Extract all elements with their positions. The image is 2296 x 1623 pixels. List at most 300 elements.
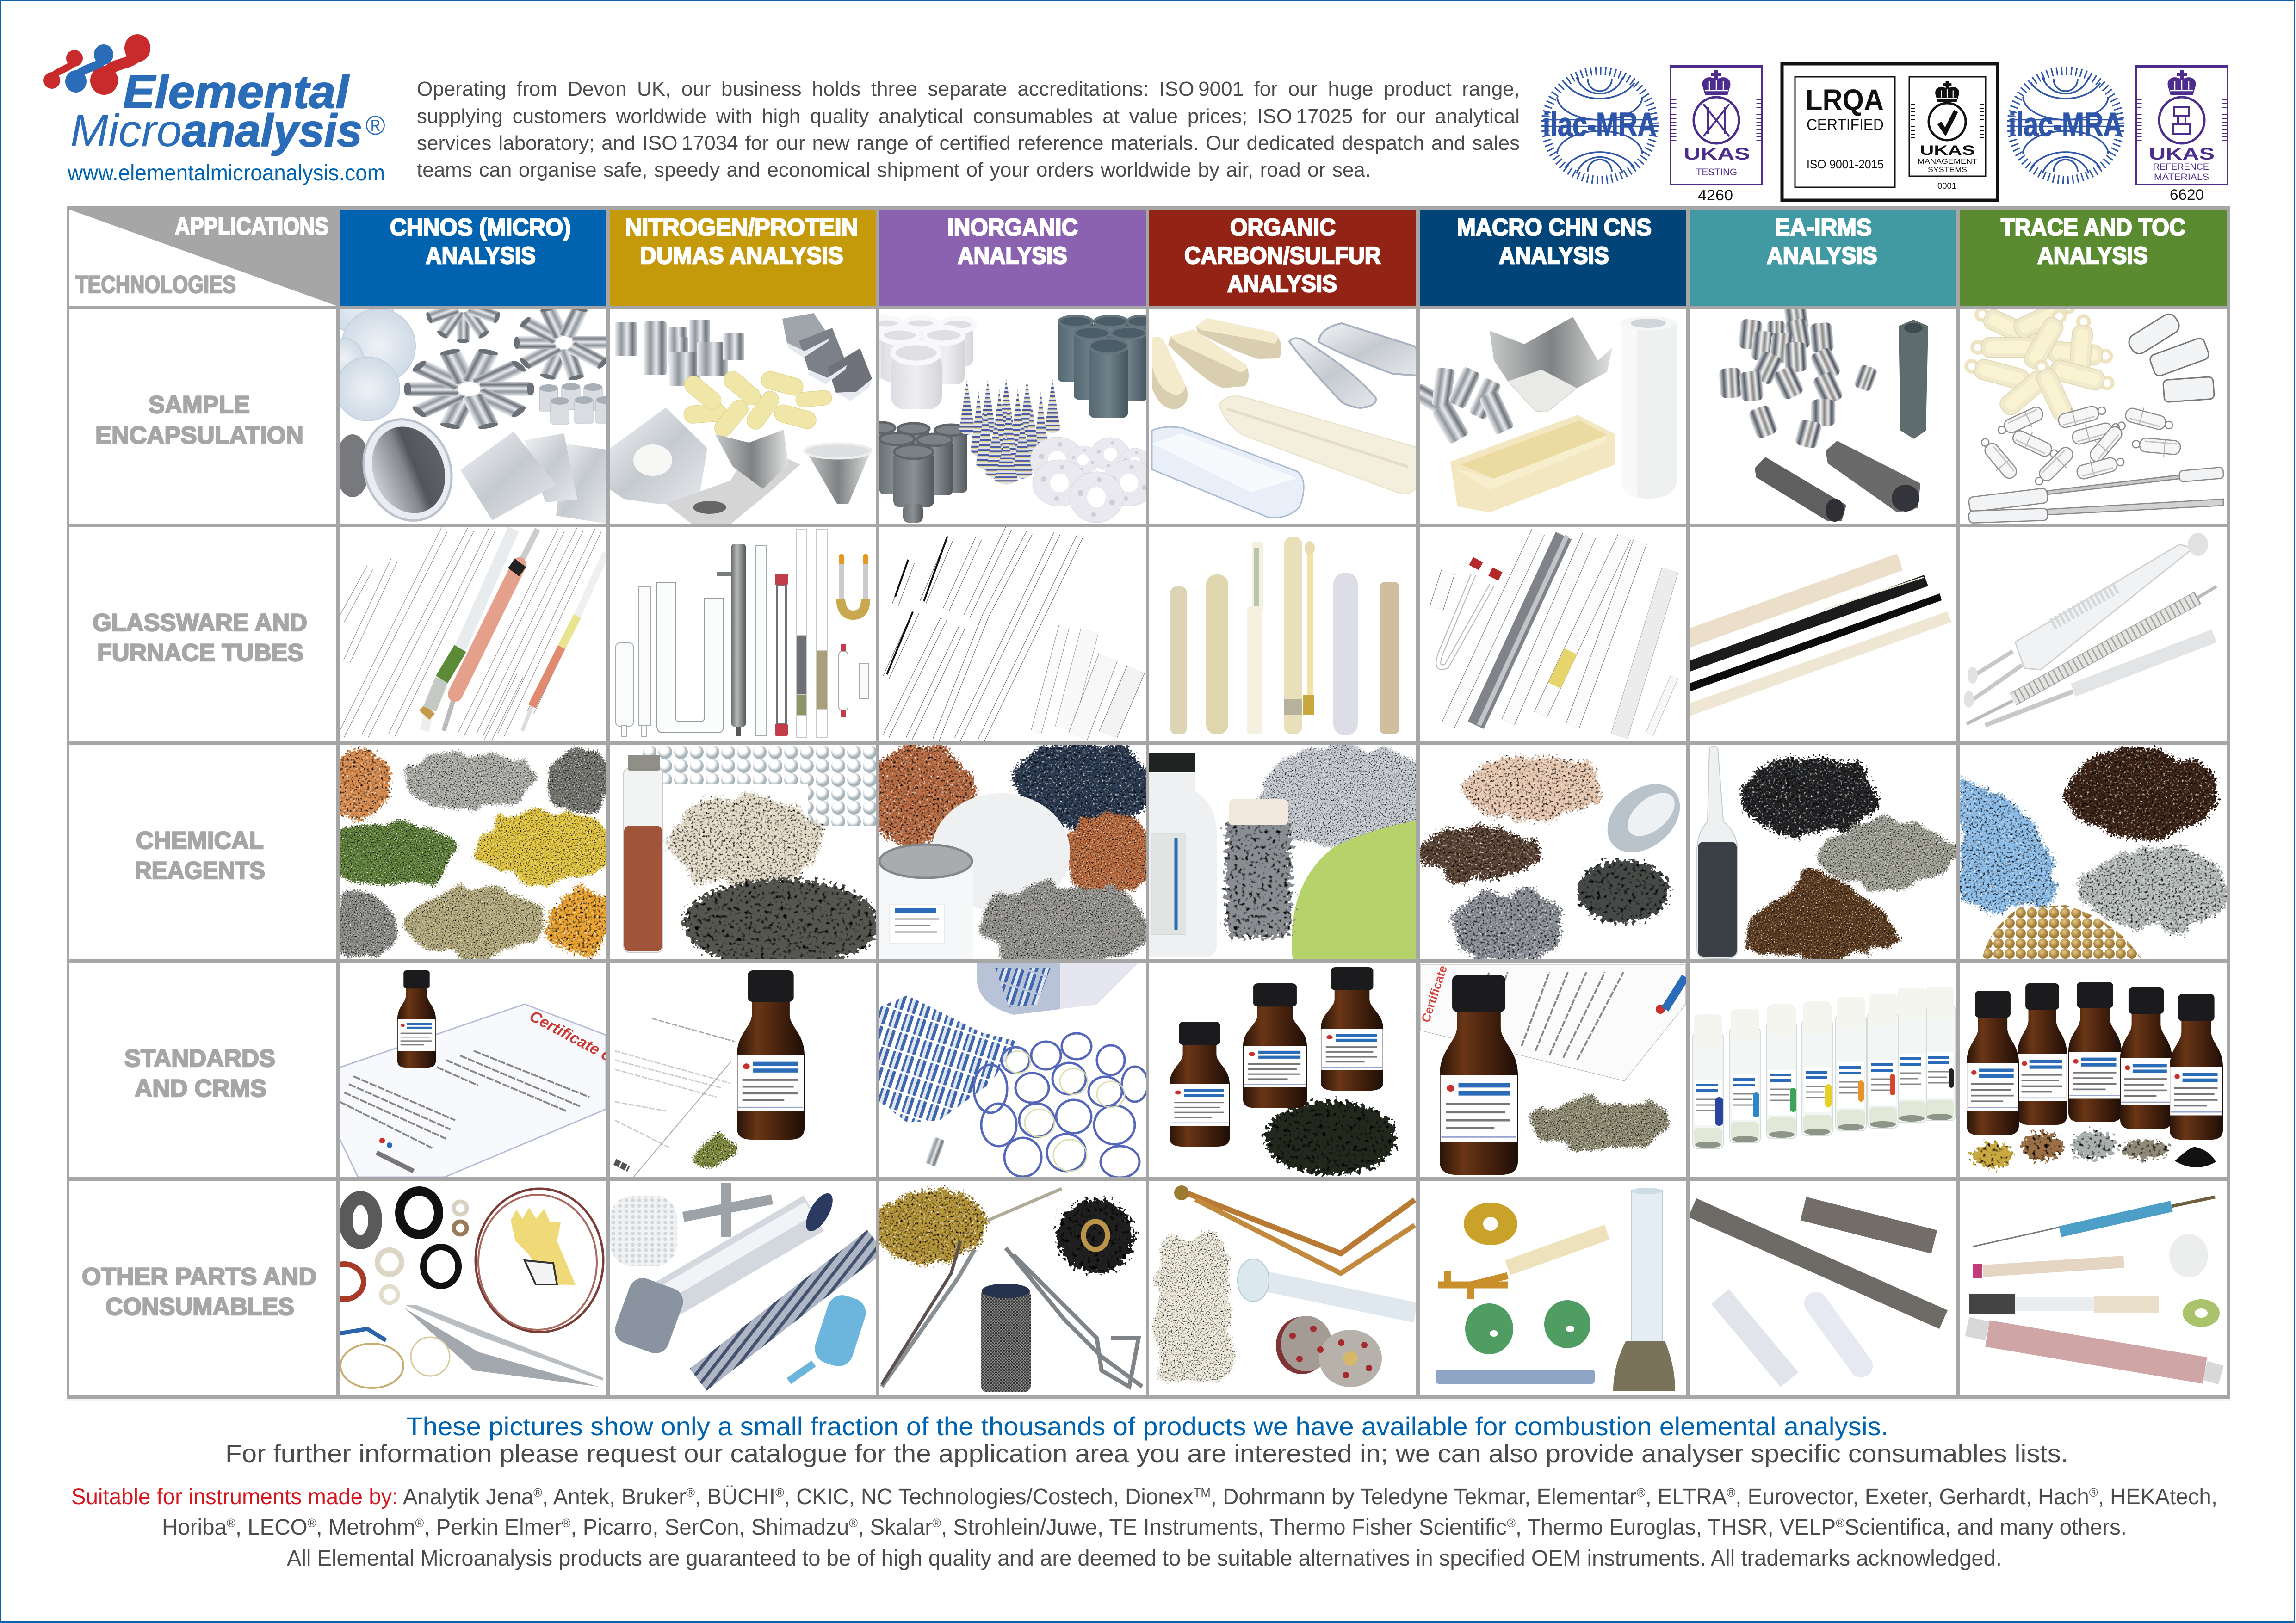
tweezers: [404, 1305, 603, 1387]
badge: LRQA certified ISO 9001-2015: LRQA: [1806, 83, 1884, 117]
badge: UKAS reference materials 6620: MATERIALS: [2154, 173, 2209, 182]
powder samples: [1972, 1131, 2216, 1168]
white tube: [1333, 573, 1358, 735]
crumpled foil: [1490, 317, 1612, 412]
badge: UKAS testing 4260: 4260: [1698, 187, 1733, 204]
footnote: instrument makers line 1: ®: [533, 1486, 542, 1500]
footnote: instrument makers line 2: ®: [562, 1516, 570, 1530]
vial colour tags: [1715, 1068, 1954, 1126]
small U-tube with beads: [839, 554, 868, 615]
gelatin capsules: [681, 368, 832, 440]
ceramic basket: [1157, 1235, 1229, 1378]
grey powder: [1256, 744, 1441, 848]
badge: LRQA certified ISO 9001-2015: CERTIFIED: [1807, 116, 1884, 134]
photo: CHNOS glassware, packed and empty tubes: [340, 527, 606, 741]
footnote: instrument makers line 1: ®: [686, 1486, 695, 1500]
dark grey granules pile: [548, 749, 616, 810]
graphite rods: [1755, 441, 1920, 522]
intro paragraph on accreditations: services laboratory; and ISO 17034 for our new range of certified reference materials. Our dedicated despatch and sales: [417, 132, 1520, 154]
photo: trace encapsulation, ceramic and glass boats: [1960, 295, 2227, 524]
green adapters: [1465, 1300, 1590, 1354]
metal lance: [717, 544, 746, 736]
footnote: instrument makers line 2: ®: [932, 1516, 941, 1530]
tongs, left: [882, 1241, 975, 1387]
cream tube lower: [1690, 611, 1952, 716]
badge: UKAS reference materials 6620: REFERENCE: [2153, 162, 2209, 172]
packed tube, copper: [444, 563, 520, 731]
badge: LRQA certified ISO 9001-2015: UKAS: [1920, 143, 1975, 158]
soil powder pile: [1532, 1100, 1671, 1150]
photo: macro encapsulation, foil, ceramic boat and filter tube: [1411, 309, 1686, 524]
empty reactor tubes: [460, 529, 606, 648]
row label: standards and CRMs: [69, 963, 336, 1177]
footnote: quality guarantee: All Elemental Microanalysis products are guaranteed to be of high quality and are deemed to be suitable alternatives in specified OEM instruments. All trademarks acknowledged.: [287, 1546, 2002, 1571]
white alumina spheres: [643, 746, 876, 826]
badge: UKAS reference materials 6620: UKAS: [2149, 144, 2215, 163]
footnote: instrument makers line 1: ®: [1637, 1486, 1646, 1500]
badge: LRQA certified ISO 9001-2015: SYSTEMS: [1928, 166, 1967, 174]
photo: organic coal standards: [1149, 963, 1416, 1177]
header: trace and TOC analysis: ANALYSIS: [2037, 242, 2148, 269]
row label: other parts and consumables: OTHER PARTS AND: [82, 1263, 316, 1290]
row label: chemical reagents: REAGENTS: [135, 857, 265, 884]
grey chips pile: [1451, 890, 1564, 963]
row label: sample encapsulation: ENCAPSULATION: [95, 422, 303, 449]
wire wheel brush: [1057, 1199, 1134, 1273]
logo: Elemental Microanalysis: [43, 34, 385, 185]
vial of silver granules: [1226, 799, 1291, 938]
cream pellets pile: [668, 796, 823, 887]
footnote: instrument makers line 1: , Eurovector, Exeter, Gerhardt, Hach: [1735, 1485, 2089, 1509]
corner cell: applications and technologies: TECHNOLOGIES: [75, 271, 236, 298]
photo: macro parts, gold disc, green adapters and glass tube: [1420, 1181, 1686, 1395]
loose tube: [925, 1137, 945, 1166]
footnote: instrument makers line 1: , ELTRA: [1646, 1485, 1727, 1509]
footnote: instrument makers line 2: , Thermo Euroglas, THSR, VELP: [1516, 1515, 1836, 1540]
ceramic tube 2: [1206, 574, 1228, 734]
photo: macro chemical reagents: [1417, 745, 1693, 963]
photo: inorganic glassware: [879, 527, 1146, 741]
badge: LRQA certified ISO 9001-2015: ISO 9001-2015: [1807, 157, 1884, 171]
grey powder pile: [980, 884, 1149, 969]
photo: inorganic tin and silver standards: [879, 963, 1148, 1178]
footnote: instrument makers line 2: , Skalar: [858, 1515, 932, 1540]
photo: EA-IRMS ceramic and black tubes: [1690, 527, 1956, 741]
footnote: instrument makers line 2: , Perkin Elmer: [424, 1515, 562, 1540]
photo: CHNOS standard with certificate: [340, 963, 650, 1177]
certificate sheet: Certificate of Analysis: [1418, 900, 1471, 1024]
row label: other parts and consumables: [69, 1181, 336, 1395]
footnote: instrument makers line 2: , Picarro, SerCon, Shimadzu: [570, 1515, 849, 1540]
spilled jar: [977, 963, 1139, 1015]
white crucibles: [873, 323, 973, 409]
dark brown granules pile: [2064, 749, 2216, 838]
photo: trace parts, syringe, septa and traps: [1960, 1181, 2227, 1395]
honeycomb cylinder: [610, 1196, 677, 1266]
photo: organic furnace tubes: [1149, 527, 1416, 741]
footnote: instrument makers line 1: , HEKAtech,: [2098, 1485, 2217, 1509]
plain glass tube: [1985, 636, 2214, 725]
header: organic carbon/sulfur analysis: CARBON/SULFUR: [1184, 242, 1381, 269]
red capped rod: [775, 574, 788, 736]
header: CHNOS (micro) analysis: ANALYSIS: [426, 242, 536, 269]
tin can: [879, 845, 973, 959]
footnote: instrument makers line 1: , CKIC, NC Technologies/Costech, Dionex: [784, 1485, 1194, 1509]
coil of tubing: [476, 1189, 603, 1332]
glass tube outlines: [886, 529, 1080, 741]
intro paragraph on accreditations: teams can organise safe, speedy and economical shipment of your orders worldwide by air, road or sea.: [417, 159, 1371, 181]
clear tubes: [1436, 532, 1640, 726]
black tube with highlights: [1690, 575, 1928, 672]
footnote: instrument makers line 1: ®: [2089, 1486, 2098, 1500]
yellow packed section: [1554, 651, 1571, 685]
photo: nitrogen standard: [610, 963, 876, 1177]
green powder: [1292, 821, 1416, 959]
photo: inorganic parts, brushes and tongs: [875, 1181, 1146, 1395]
header: macro CHN CNS analysis: [1420, 210, 1686, 306]
grey granules pile: [401, 752, 536, 809]
dark ferrule assembly: [1969, 1304, 2159, 1305]
photo: inorganic chemical reagents: [863, 741, 1157, 969]
intro paragraph on accreditations: [417, 76, 1520, 184]
row label: glassware and furnace tubes: [69, 527, 336, 741]
bottle: coal standard 3: [1321, 967, 1383, 1091]
footnote: instrument makers line 2: Scientifica, and many others.: [1844, 1515, 2127, 1540]
capsule star, top right: [514, 305, 614, 381]
footnote: instrument makers line 2: ®: [308, 1516, 316, 1530]
footnote: instrument makers line 2: , Strohlein/Juwe, TE Instruments, Thermo Fisher Scientific: [941, 1515, 1507, 1540]
photo: CHNOS encapsulation, tin capsules and foils: [324, 265, 614, 534]
capsule star, centre: [404, 348, 534, 430]
badge: LRQA certified ISO 9001-2015: MANAGEMENT: [1918, 158, 1977, 166]
header: nitrogen/protein dumas analysis: NITROGEN/PROTEIN: [625, 214, 858, 241]
beige fine pile: [408, 888, 543, 956]
intro paragraph on accreditations: Operating from Devon UK, our business holds three separate accreditations: ISO 9001 for our huge product range,: [417, 78, 1520, 100]
small glass boats: [1975, 400, 2181, 491]
ceramic tube 3 with slot: [1247, 542, 1263, 734]
dark pellets pile: [1577, 860, 1670, 923]
green powder: [693, 1135, 737, 1166]
photo: organic chemical reagents: [1149, 744, 1441, 959]
photo: nitrogen glassware and lance: [610, 527, 876, 741]
footnote: instrument makers line 2: ®: [849, 1516, 858, 1530]
header: nitrogen/protein dumas analysis: [610, 210, 876, 306]
pink granules pile: [1464, 756, 1603, 821]
logo registered mark: ®: [365, 111, 385, 141]
badge: LRQA certified ISO 9001-2015: [1782, 64, 1998, 200]
row label: chemical reagents: CHEMICAL: [136, 827, 264, 854]
U-tube: [657, 582, 724, 733]
footnote: instrument makers line 1: , Dohrmann by Teledyne Tekmar, Elementar: [1211, 1485, 1637, 1509]
white filter tube: [1620, 316, 1677, 499]
certificate sheet: Certificate of Ana: [526, 1007, 650, 1084]
row label: sample encapsulation: [69, 309, 336, 524]
photo: macro glass tubes: [1420, 527, 1686, 741]
row label: glassware and furnace tubes: FURNACE TUBES: [97, 639, 303, 666]
glass wool: [1594, 770, 1693, 866]
photo: EA-IRMS encapsulation, silver capsules and graphite rods: [1690, 302, 1956, 524]
large amber bottle: [1440, 975, 1518, 1175]
liner: [1973, 1262, 2124, 1278]
silver wool: [931, 793, 1070, 912]
small amber bottle: [397, 970, 436, 1068]
grey crucibles, lower left: [866, 428, 967, 523]
black tube: [1690, 593, 1942, 691]
pink trap: [1967, 1327, 2221, 1375]
badge: UKAS testing 4260: [1670, 65, 1763, 204]
amber bottle: [737, 970, 805, 1140]
logo word: Microanalysis: Microanalysis: [70, 105, 362, 156]
certificate logo: [377, 1138, 414, 1171]
footnote: instrument makers line 1: ®: [775, 1486, 784, 1500]
footnote: instrument makers line 2: , LECO: [235, 1515, 308, 1540]
header: trace and TOC analysis: [1960, 210, 2227, 306]
septum: [2169, 1234, 2208, 1277]
header: organic carbon/sulfur analysis: ORGANIC: [1230, 214, 1336, 241]
header: EA-IRMS analysis: ANALYSIS: [1767, 242, 1877, 269]
header: CHNOS (micro) analysis: [340, 210, 606, 306]
capsule star, top centre: [425, 302, 501, 343]
U-tube with red caps: [1438, 560, 1498, 667]
long white boat: [1219, 396, 1418, 494]
dark tube edges: [887, 537, 947, 674]
copper wire pile: [863, 743, 970, 847]
photo: trace glass reactors: [1960, 527, 2227, 741]
brown powder pile: [1745, 867, 1898, 958]
foil cone: [805, 444, 872, 504]
footnote: blue statement: These pictures show only a small fraction of the thousands of products we have available for combustion elemental analysis.: [406, 1412, 1888, 1441]
footnote: instrument makers line 2: ®: [1507, 1516, 1516, 1530]
row label: sample encapsulation: SAMPLE: [149, 391, 250, 419]
blue trap: [789, 1291, 870, 1381]
photo: CHNOS parts, O-rings, tubing, gloves and tweezers: [325, 1181, 606, 1395]
badge: ilac-MRA left: [1543, 71, 1657, 180]
badge: UKAS reference materials 6620: [2135, 65, 2228, 203]
square foils: [460, 432, 606, 524]
long graphite rod: [1692, 1208, 1943, 1320]
safety glasses: [340, 1329, 450, 1388]
header: organic carbon/sulfur analysis: [1149, 210, 1416, 306]
photo: trace chemical reagents: [1960, 745, 2229, 959]
header: nitrogen/protein dumas analysis: DUMAS ANALYSIS: [640, 242, 843, 269]
table frame: [67, 206, 2230, 1399]
header: inorganic analysis: INORGANIC: [947, 214, 1078, 241]
orange rods pile: [325, 747, 391, 819]
glass boat: [1152, 427, 1304, 518]
footnote: instrument makers line 2: Horiba: [162, 1515, 227, 1540]
tin boats: [782, 313, 872, 401]
packed tube, red and yellow: [522, 616, 577, 731]
silver tube pile: [879, 995, 1018, 1123]
header: EA-IRMS analysis: EA-IRMS: [1775, 214, 1872, 241]
packed tube, green and grey: [424, 648, 460, 731]
yellow granules pile: [478, 810, 619, 882]
photo: EA-IRMS parts, graphite rods and glass vials: [1690, 1181, 1956, 1395]
bottle: coal standard 1: [1170, 1022, 1230, 1147]
photo: EA-IRMS water standards: [1690, 963, 1956, 1177]
row label: glassware and furnace tubes: GLASSWARE AND: [93, 609, 307, 636]
dark blue granules pile: [1013, 741, 1153, 827]
grey crucibles, upper right: [1058, 321, 1151, 418]
photo: nitrogen chemical reagents: [610, 745, 879, 968]
copper coil leads: [1174, 1185, 1415, 1273]
footnote: instrument makers line 1: ®: [1727, 1486, 1735, 1500]
wide pale tubes: [1619, 570, 1675, 736]
badge: UKAS testing 4260: UKAS: [1683, 144, 1750, 163]
glass boats, upper right: [2126, 311, 2215, 402]
footnote: instrument makers line 1: , Antek, Bruker: [542, 1485, 686, 1509]
yellow glove: [511, 1208, 576, 1285]
green granules pile: [319, 823, 458, 886]
silver boats: [1289, 323, 1419, 408]
white tube with glass cup: [1238, 1259, 1416, 1313]
packed tall tubes: [797, 529, 827, 737]
orange granules pile: [549, 888, 619, 954]
tan balls pile: [1982, 905, 2141, 959]
long glass tube: [1632, 1188, 1663, 1343]
copper granules pile: [1064, 812, 1157, 895]
badge: ilac-MRA right: [2009, 71, 2123, 180]
graduated reactor tube: [698, 1241, 876, 1380]
row label: other parts and consumables: CONSUMABLES: [105, 1293, 294, 1321]
corner cell: applications and technologies: [69, 210, 336, 306]
photo: macro soil standard: [1418, 900, 1686, 1177]
photo: organic parts, coils, basket and discs: [1149, 1181, 1416, 1395]
row of water vials: [1693, 987, 1955, 1148]
certificate sheet: [340, 1004, 650, 1177]
bottle: coal standard 2: [1243, 983, 1307, 1108]
threaded screw: [1436, 1370, 1595, 1384]
dark pellets pile: [683, 879, 879, 968]
mesh cylinder: [981, 1284, 1031, 1392]
icon: linked dots mark: [43, 34, 150, 95]
round glass vial: [1816, 1303, 1861, 1366]
filter discs: [324, 265, 415, 421]
photo: organic encapsulation, ceramic and silver boats: [1149, 309, 1419, 524]
header: EA-IRMS analysis: [1690, 210, 1956, 306]
row label: standards and CRMs: STANDARDS: [124, 1045, 275, 1072]
foil dish and stack: [335, 406, 466, 534]
blue granules pile: [1960, 778, 2057, 911]
large glass reactor: [1964, 533, 2208, 708]
footnote: instrument makers line 1: Suitable for instruments made by: Analytik Jena: [71, 1485, 535, 1509]
capsule rings: [974, 1033, 1148, 1178]
ceramic washers: [1030, 437, 1156, 523]
photo: nitrogen encapsulation, foil cups and gelatin capsules: [610, 309, 876, 524]
packed glass reactor: [1967, 586, 2216, 724]
grey rods pile: [327, 894, 397, 959]
grey rods pile: [1821, 821, 1955, 888]
intro paragraph on accreditations: supplying customers worldwide with high quality analytical consumables at value prices; ISO 17025 for our analytical: [417, 105, 1520, 128]
rubber rings: [325, 1191, 467, 1303]
short graphite rod: [1803, 1209, 1934, 1242]
large foil sheet: [610, 407, 800, 524]
photo: inorganic encapsulation, crucibles and springs: [866, 309, 1156, 524]
footnote: instrument makers line 2: ®: [227, 1516, 235, 1530]
plastic bottle: [1149, 753, 1217, 957]
header: trace and TOC analysis: TRACE AND TOC: [2001, 214, 2185, 241]
black chips pile: [1741, 757, 1878, 837]
footnote: instrument makers line 1: TM: [1194, 1486, 1211, 1500]
badge: UKAS testing 4260: TESTING: [1696, 167, 1737, 178]
row label: chemical reagents: [69, 745, 336, 959]
grey metal tube: [1476, 536, 1567, 725]
footnote: instrument makers line 2: ®: [415, 1516, 424, 1530]
spring cones: [959, 379, 1060, 484]
footnote: instrument makers line 2: , Metrohm: [316, 1515, 415, 1540]
photo: nitrogen parts, reactor tube and cylinders: [610, 1181, 876, 1395]
corner cell: applications and technologies: APPLICATIONS: [175, 213, 328, 240]
photo: EA-IRMS chemical reagents: [1690, 745, 1956, 959]
tin cylinders: [1411, 366, 1515, 445]
five amber bottles: [1967, 982, 2223, 1140]
header: macro CHN CNS analysis: MACRO CHN CNS: [1457, 214, 1652, 241]
coal powder pile: [1265, 1101, 1396, 1175]
certificate sheet: [1418, 900, 1686, 1081]
metal spider: [683, 1183, 772, 1237]
gold disc: [1464, 1203, 1517, 1245]
header: organic carbon/sulfur analysis: ANALYSIS: [1227, 271, 1337, 297]
accreditation badges: [1543, 64, 2228, 204]
wide glass tubes: [1036, 627, 1136, 736]
ceramic tube 4 with clamp: [1284, 537, 1315, 734]
glass boats with long handles: [1968, 467, 2224, 523]
square glass vial: [1720, 1296, 1789, 1380]
metal base: [1613, 1341, 1675, 1391]
photo: trace soil standards: [1960, 963, 2227, 1177]
row label: standards and CRMs: AND CRMS: [135, 1075, 266, 1102]
header: inorganic analysis: [879, 210, 1146, 306]
hexagonal rod: [1899, 320, 1928, 439]
slotted metal discs: [1276, 1316, 1382, 1387]
footnote: catalogue request: For further information please request our catalogue for the application area you are interested in; we can also provide analyser specific consumables lists.: [225, 1440, 2068, 1468]
glass tube set: [341, 529, 599, 741]
cream tube upper: [1690, 554, 1903, 648]
badge: LRQA certified ISO 9001-2015: 0001: [1937, 181, 1956, 191]
ceramic handled boats: [1964, 295, 2115, 424]
green ring: [2183, 1299, 2220, 1327]
shiny capsules: [1719, 302, 1878, 450]
website address: www.elementalmicroanalysis.com: [67, 161, 385, 185]
logo word: Elemental: Elemental: [123, 66, 350, 118]
grey-white granules pile: [2081, 848, 2229, 929]
crumpled tin cups: [615, 320, 744, 386]
footnote: instrument makers line 2: ®: [1836, 1516, 1844, 1530]
ceramic boats: [1152, 318, 1281, 409]
brass brush: [875, 1189, 1062, 1264]
cream rod and fork: [1438, 1232, 1607, 1299]
ampoule: [1697, 747, 1738, 958]
header: macro CHN CNS analysis: ANALYSIS: [1499, 242, 1609, 269]
brown granules pile: [1417, 827, 1539, 877]
tongs, right: [1006, 1248, 1142, 1387]
tan tube: [1380, 582, 1399, 734]
ceramic crucible: [1450, 415, 1615, 512]
small red-ended tube: [839, 644, 848, 717]
small foil cups: [539, 383, 614, 424]
vial with copper wire: [624, 755, 663, 952]
badge: UKAS reference materials 6620: 6620: [2170, 186, 2204, 203]
photo: CHNOS chemical reagents: [319, 745, 619, 959]
clear glass tubes: [616, 545, 868, 736]
clear reactor tube: [611, 1189, 838, 1357]
header: inorganic analysis: ANALYSIS: [958, 242, 1067, 269]
syringe: [1973, 1197, 2215, 1247]
footnote: instrument makers line 1: , BÜCHI: [695, 1485, 775, 1509]
certificate sheet: [615, 1018, 735, 1177]
header: CHNOS (micro) analysis: CHNOS (MICRO): [390, 214, 571, 241]
ceramic tube 1: [1170, 586, 1187, 734]
